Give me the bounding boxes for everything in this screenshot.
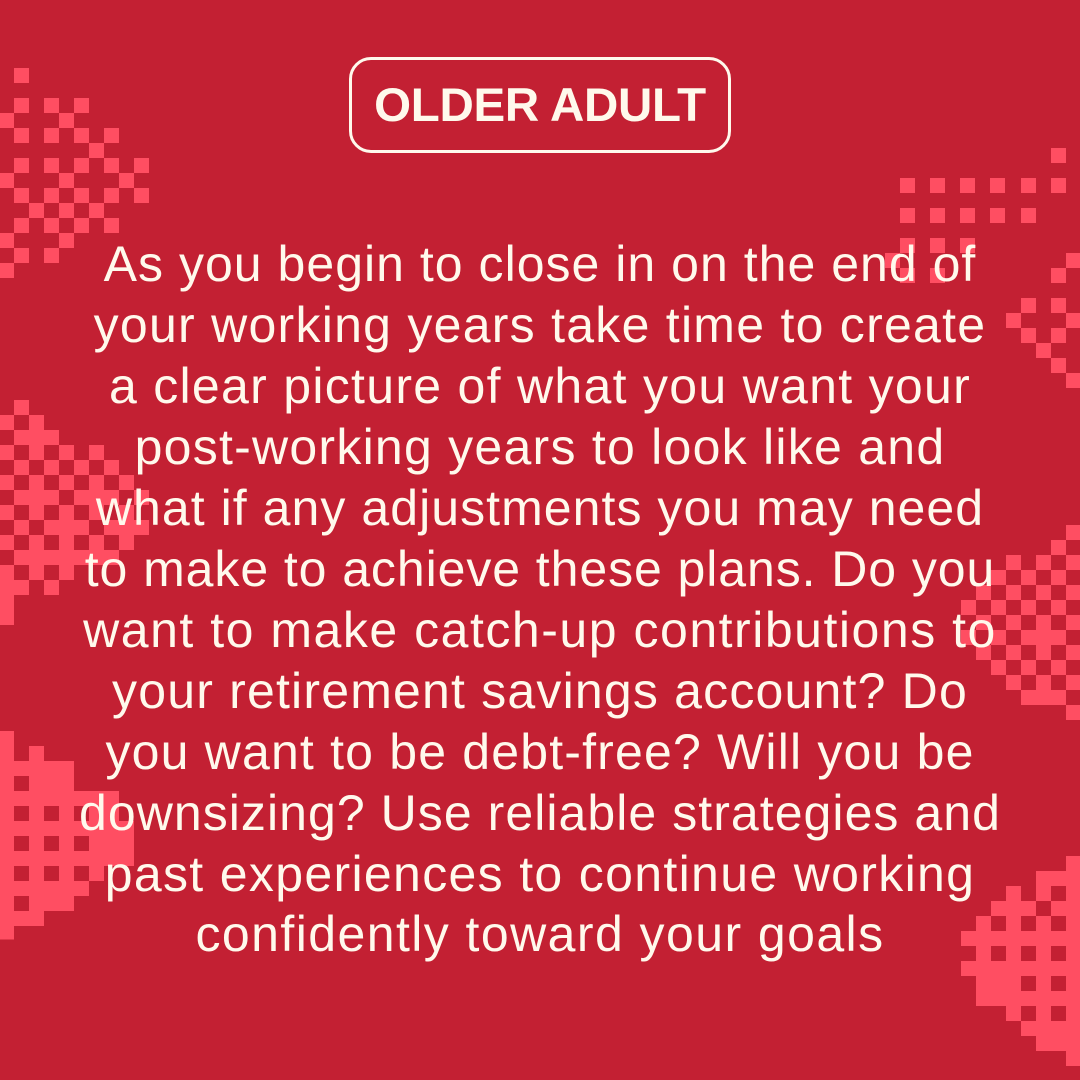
pixel cluster: middle left: [0, 408, 149, 618]
body text block: what if any adjustments you may need: [96, 480, 984, 536]
body text block: want to make catch-up contributions to: [83, 602, 997, 658]
pixel cluster: bottom right: [961, 864, 1080, 1058]
body text block: confidently toward your goals: [195, 906, 885, 962]
title badge: OLDER ADULT: [349, 57, 731, 153]
body text block: past experiences to continue working: [105, 846, 975, 902]
pixel cluster: top right dots: [885, 156, 1066, 276]
body text block: your working years take time to create: [94, 297, 986, 353]
body text block: you want to be debt-free? Will you be: [105, 724, 975, 780]
body text block: a clear picture of what you want your: [109, 358, 971, 414]
body text block: downsizing? Use reliable strategies and: [79, 785, 1001, 841]
pixel cluster: upper right: [1006, 260, 1080, 380]
body text block: your retirement savings account? Do: [112, 663, 968, 719]
body text block: to make to achieve these plans. Do you: [85, 541, 995, 597]
pixel cluster: top left: [0, 76, 149, 270]
body text block: post-working years to look like and: [135, 419, 945, 475]
body text block: [79, 236, 1001, 962]
pixel cluster: middle right: [961, 532, 1080, 712]
pixel cluster: bottom left: [0, 738, 134, 932]
body text block: As you begin to close in on the end of: [104, 236, 976, 292]
title badge: OLDER ADULT: OLDER ADULT: [374, 79, 706, 132]
